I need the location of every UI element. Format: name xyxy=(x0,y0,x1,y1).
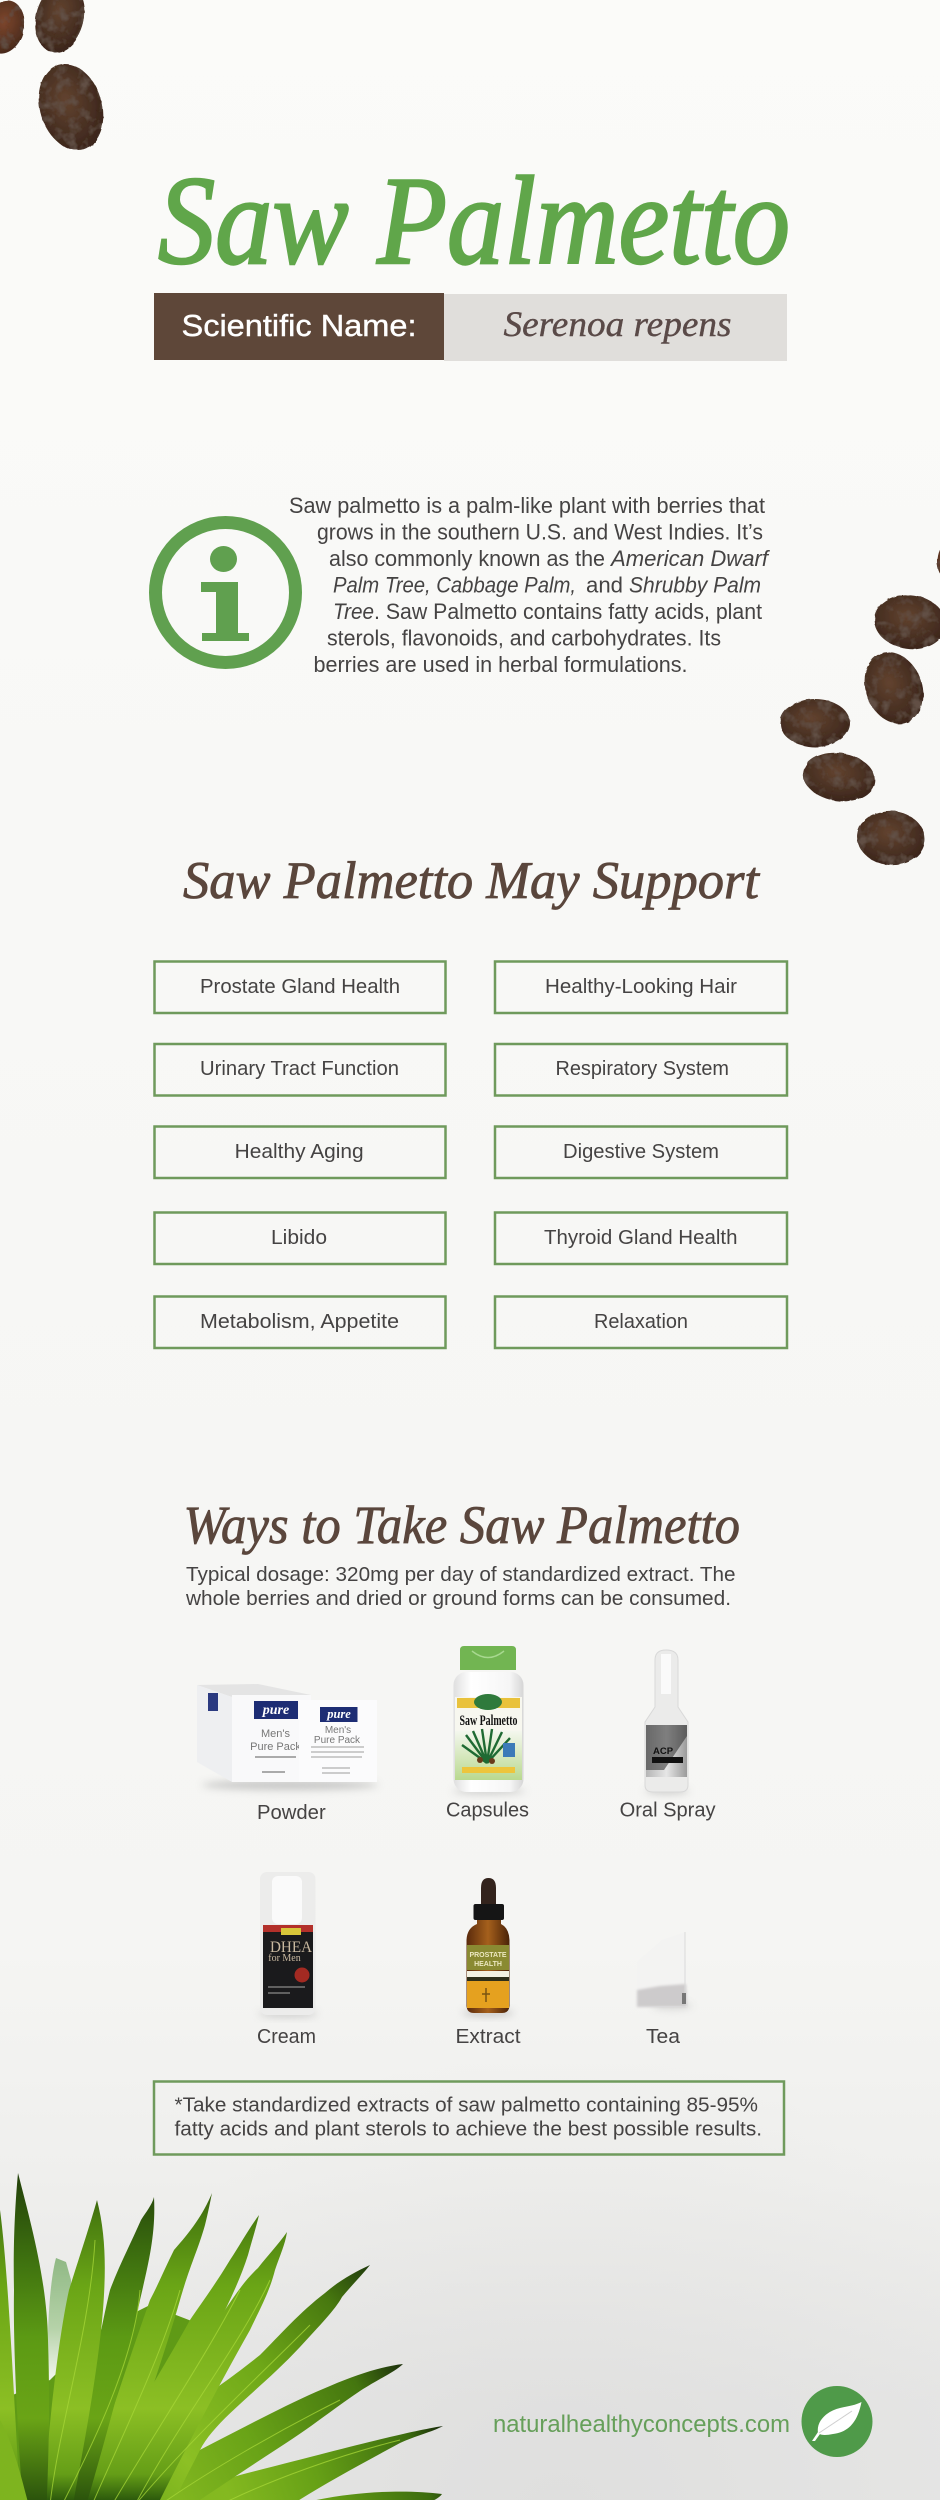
box: healthy-looking hair: Healthy-Looking Hair xyxy=(545,975,737,998)
scientific name banner: Serenoa repens xyxy=(504,304,732,344)
product: extract xyxy=(462,1878,514,2016)
intro text block: and xyxy=(586,572,623,598)
title: Saw Palmetto xyxy=(158,152,790,291)
box: healthy-looking hair xyxy=(495,962,787,1013)
intro text block: also commonly known as the xyxy=(329,546,605,571)
product: extract: PROSTATE xyxy=(469,1952,507,1959)
note box: *Take standardized extracts of saw palmetto containing 85-95% xyxy=(174,2094,758,2117)
note box: fatty acids and plant sterols to achieve the best possible results. xyxy=(174,2118,762,2141)
label: cream: Cream xyxy=(257,2025,316,2048)
intro text block: . Saw Palmetto contains fatty acids, plant xyxy=(374,599,762,624)
box: digestive system xyxy=(495,1126,787,1178)
box: digestive system: Digestive System xyxy=(563,1140,719,1163)
product: oral spray: ACP xyxy=(653,1746,674,1757)
box: metabolism, appetite xyxy=(154,1296,446,1348)
box: respiratory system xyxy=(495,1044,787,1096)
product: cream: for Men xyxy=(268,1953,301,1964)
product: extract: HEALTH xyxy=(474,1961,502,1968)
scientific name banner xyxy=(154,293,787,361)
product: capsules xyxy=(453,1646,525,1794)
label: powder: Powder xyxy=(257,1801,326,1824)
label: extract: Extract xyxy=(456,2025,521,2048)
heading: ways to take: Ways to Take Saw Palmetto xyxy=(184,1495,740,1555)
support grid xyxy=(154,962,787,1348)
box: prostate gland health xyxy=(154,962,446,1013)
note box xyxy=(154,2082,784,2154)
intro text block: Palm Tree, Cabbage Palm, xyxy=(333,572,576,598)
dosage text: Typical dosage: 320mg per day of standardized extract. The xyxy=(186,1563,736,1586)
product: powder xyxy=(197,1684,378,1790)
product: cream: DHEA xyxy=(270,1939,312,1956)
product: powder: Pure Pack xyxy=(250,1741,301,1753)
icon: info xyxy=(156,522,296,662)
product: powder: Men's xyxy=(261,1728,290,1740)
intro text block xyxy=(289,493,771,677)
label: tea: Tea xyxy=(646,2025,681,2048)
scientific name banner: Scientific Name: xyxy=(182,308,416,343)
intro text block: American Dwarf xyxy=(609,546,771,571)
box: respiratory system: Respiratory System xyxy=(556,1057,729,1080)
product: tea xyxy=(637,1932,692,2010)
box: relaxation: Relaxation xyxy=(594,1310,688,1333)
palm leaves xyxy=(0,2173,443,2500)
box: relaxation xyxy=(495,1296,787,1348)
product: capsules: Saw Palmetto xyxy=(460,1713,518,1729)
box: prostate gland health: Prostate Gland Health xyxy=(200,975,400,998)
box: libido xyxy=(154,1212,446,1264)
box: thyroid gland health xyxy=(495,1212,787,1264)
dosage text xyxy=(185,1563,736,1610)
website url: naturalhealthyconcepts.com xyxy=(493,2411,790,2438)
dosage text: whole berries and dried or ground forms can be consumed. xyxy=(185,1587,731,1610)
intro text block: Tree xyxy=(333,599,374,624)
box: healthy aging: Healthy Aging xyxy=(235,1140,364,1163)
heading: may support: Saw Palmetto May Support xyxy=(183,852,760,910)
product: cream xyxy=(258,1872,318,2017)
berries: top left xyxy=(0,0,114,158)
product: powder: pure xyxy=(326,1707,351,1721)
intro text block: Shrubby Palm xyxy=(629,572,761,598)
intro text block: berries are used in herbal formulations. xyxy=(314,652,688,677)
berries: right side xyxy=(780,545,940,868)
intro text block: Saw palmetto is a palm-like plant with berries that xyxy=(289,493,765,518)
product: powder: Pure Pack xyxy=(314,1735,361,1746)
intro text block: grows in the southern U.S. and West Indies. It’s xyxy=(317,520,763,544)
box: libido: Libido xyxy=(271,1226,327,1249)
box: metabolism, appetite: Metabolism, Appetite xyxy=(200,1310,399,1333)
box: thyroid gland health: Thyroid Gland Health xyxy=(544,1226,738,1249)
product: powder: pure xyxy=(262,1703,289,1718)
label: capsules: Capsules xyxy=(446,1799,529,1822)
product: powder: Men's xyxy=(325,1725,351,1736)
logo: leaf xyxy=(802,2386,872,2457)
box: urinary tract function: Urinary Tract Function xyxy=(200,1057,399,1080)
product: oral spray xyxy=(645,1650,689,1794)
intro text block: sterols, flavonoids, and carbohydrates. Its xyxy=(327,626,721,650)
box: healthy aging xyxy=(154,1126,446,1178)
box: urinary tract function xyxy=(154,1044,446,1096)
label: oral spray: Oral Spray xyxy=(620,1799,716,1822)
